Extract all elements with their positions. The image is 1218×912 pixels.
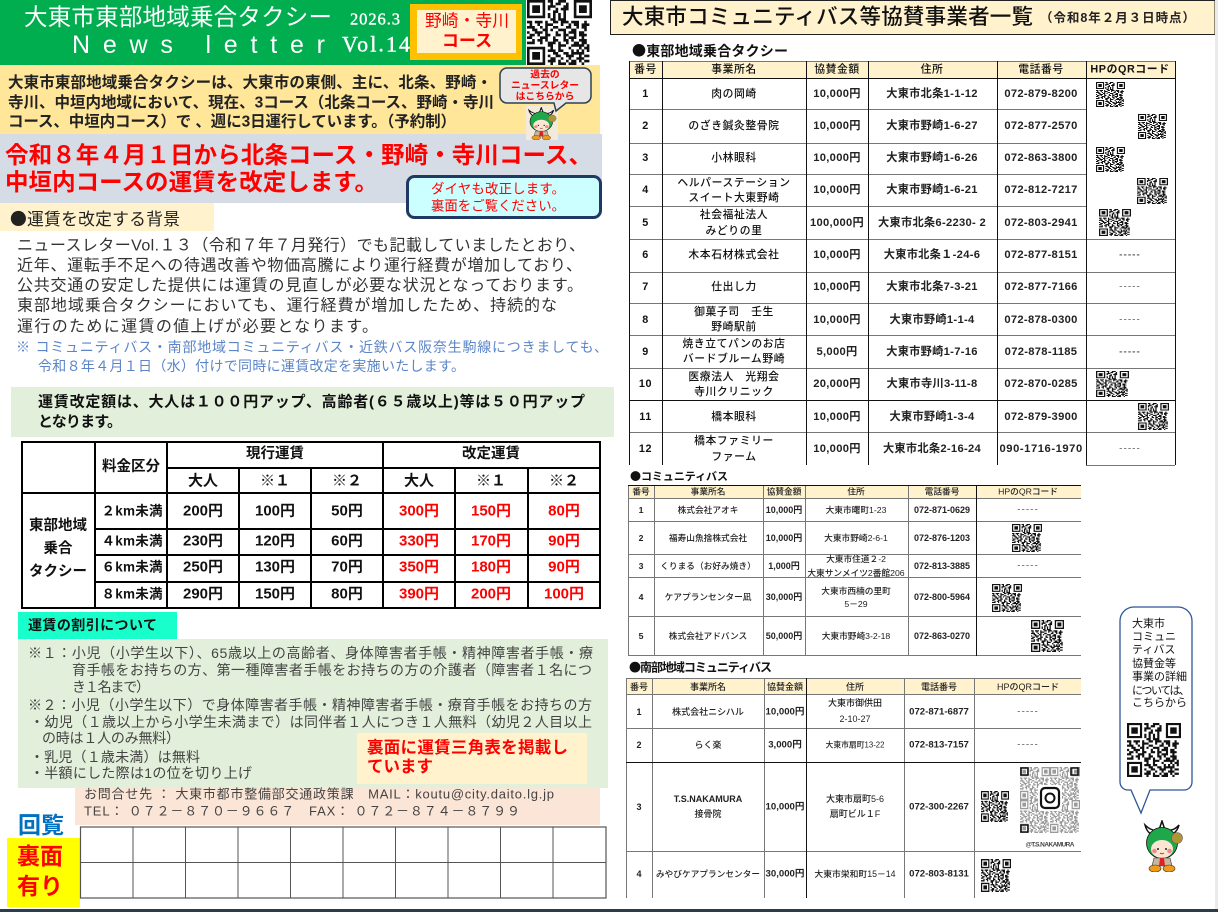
table: eastern taxi sponsors: 10,000円	[813, 410, 861, 423]
table: southern community bus sponsors: T.S.NAKAMURA	[674, 794, 743, 804]
fare table header: 大人	[188, 472, 218, 490]
table: eastern taxi sponsors: 072-877-2570	[1004, 120, 1078, 132]
fare table rows: 100円	[544, 586, 584, 602]
text block: background explanation: ニュースレターVol.１３（令和７年７月発行）でも記載していましたとおり、	[17, 236, 585, 254]
intro panel	[0, 65, 600, 134]
text block: background explanation: 公共交通の安定した提供には運賃の見直しが必要な状況となっております。	[17, 276, 583, 294]
table: southern community bus sponsors: 072-813-7157	[909, 740, 969, 750]
speech bubble: sponsorship details: ティバス	[1132, 643, 1175, 656]
newsletter wordmark: News letter	[72, 31, 325, 59]
table: community bus sponsors: 072-863-0270	[914, 631, 970, 641]
table: southern community bus sponsors: 4	[636, 869, 642, 879]
QR codes: southern bus	[981, 791, 1011, 892]
table: eastern taxi sponsors: 大東市北条2-16-24	[883, 441, 982, 455]
fare table rows: 150円	[471, 502, 511, 520]
table: community bus sponsors: 30,000円	[766, 592, 802, 602]
right title bar: （令和8年２月３日時点）	[1040, 10, 1195, 25]
fare table header: ※１	[476, 472, 506, 490]
table header: 協賛金額	[814, 62, 860, 76]
table: eastern taxi sponsors: 5	[642, 217, 649, 229]
fare table header: 現行運賃	[246, 445, 304, 462]
intro panel: 寺川、中垣内地域において、現在、3コース（北条コース、野崎・寺川	[8, 92, 494, 112]
panel: discount details: ・幼児（１歳以上から小学生未満まで）は同伴者１人につき１人無料（幼児２人目以上	[30, 714, 592, 730]
table: eastern taxi sponsors: -----	[1119, 314, 1141, 326]
table: community bus sponsors: 大東サンメイツ2番館206	[807, 567, 905, 578]
text block: background explanation: 近年、運転手不足への待遇改善や物価高騰により運行経費が増加しており、	[17, 256, 582, 274]
speech bubble: past newsletters: ニュースレター	[511, 80, 579, 92]
panel: discount details: ※２：小児（小学生以下）で身体障害者手帳・精神障害者手帳・療育手帳をお持ちの方	[28, 697, 592, 713]
speech bubble: sponsorship details: こちらから	[1132, 696, 1187, 709]
panel: discount details: き１名まで）	[72, 679, 150, 695]
table: eastern taxi sponsors: 072-877-8151	[1004, 249, 1078, 261]
note: other bus lines	[16, 339, 608, 374]
table: southern community bus sponsors: 072-803-8131	[909, 868, 970, 880]
table: community bus sponsors: 2	[639, 533, 644, 543]
icon: Instagram QR code: @T.S.NAKAMURA	[1026, 842, 1075, 848]
table header: 住所	[921, 62, 943, 76]
table header: 番号	[632, 486, 650, 496]
note: other bus lines: ※ コミュニティバス・南部地域コミュニティバス・近鉄バス阪奈生駒線につきましても、	[16, 339, 608, 355]
table: eastern taxi sponsors: 大東市野崎1-6-27	[886, 118, 978, 132]
table: southern community bus sponsors: 30,000円	[766, 868, 804, 880]
table: community bus sponsors: 4	[639, 592, 644, 602]
QR code: sponsorship details	[1127, 723, 1181, 777]
table: eastern taxi sponsors: -----	[1119, 250, 1141, 260]
heading: southern community bus sponsors: ●南部地域コミュニティバス	[629, 658, 772, 676]
header banner	[0, 0, 526, 65]
fare revision headline: 中垣内コースの運賃を改定します。	[5, 169, 378, 195]
table: southern community bus sponsors: 3	[636, 802, 642, 812]
speech bubble: past newsletters: 過去の	[530, 68, 560, 80]
table: eastern taxi sponsors: 7	[642, 281, 649, 293]
heading: community bus sponsors: ●コミュニティバス	[630, 468, 728, 484]
fare table header: ※１	[260, 472, 290, 490]
table: community bus sponsors: 072-871-0629	[914, 505, 970, 515]
heading: fare discounts: 運賃の割引について	[28, 617, 157, 633]
table: eastern taxi sponsors: 10,000円	[813, 119, 861, 132]
table: eastern taxi sponsors: 大東市野崎1-7-16	[886, 344, 978, 358]
fare table header: 料金区分	[102, 457, 160, 475]
fare table row label: 東部地域	[29, 517, 87, 534]
table: eastern taxi sponsors: 10,000円	[813, 313, 861, 326]
table: eastern taxi sponsors: 大東市野崎1-6-26	[886, 150, 978, 164]
table: eastern taxi sponsors: 10,000円	[813, 87, 861, 100]
table: eastern taxi sponsors: 5,000円	[817, 345, 857, 358]
table: eastern taxi sponsors: ヘルパーステーション	[677, 176, 791, 189]
right title bar	[610, 0, 1215, 34]
table: eastern taxi sponsors: のざき鍼灸整骨院	[688, 118, 780, 132]
table header: 番号	[634, 62, 657, 76]
heading: eastern taxi sponsors: ●東部地域乗合タクシー	[632, 41, 788, 61]
heading: background of revision	[0, 203, 214, 231]
table: community bus sponsors: 072-800-5964	[914, 592, 970, 602]
table: southern community bus sponsors: -----	[1017, 740, 1039, 750]
table: southern community bus sponsors: 10,000円	[766, 802, 804, 812]
table header: HPのQRコード	[997, 682, 1059, 692]
mascot: bottom right	[1145, 821, 1182, 872]
table: community bus sponsors: -----	[1017, 504, 1039, 516]
table: eastern taxi sponsors: 072-812-7217	[1004, 184, 1078, 196]
table header: 住所	[847, 486, 865, 496]
table: eastern taxi sponsors: 大東市野崎1-1-4	[889, 312, 975, 326]
table: eastern taxi sponsors: 10,000円	[813, 442, 861, 455]
table: eastern taxi sponsors: -----	[1119, 346, 1141, 358]
fare table row label: タクシー	[29, 563, 87, 580]
table: eastern taxi sponsors: 10,000円	[813, 151, 861, 164]
fare table rows: 50円	[331, 502, 363, 520]
table: eastern taxi sponsors: 大東市寺川3-11-8	[887, 376, 977, 390]
table: eastern taxi sponsors: スイート大東野崎	[688, 190, 780, 204]
heading: fare discounts	[18, 612, 177, 639]
text block: background explanation: 東部地域乗合タクシーにおいても、運行経費が増加したため、持続的な	[17, 296, 557, 314]
table: eastern taxi sponsors: 6	[642, 249, 649, 261]
table: community bus sponsors: 1,000円	[768, 561, 800, 571]
fare table rows	[102, 502, 584, 602]
table: eastern taxi sponsors: 10,000円	[813, 280, 861, 293]
table header: 電話番号	[925, 486, 960, 496]
table: eastern taxi sponsors	[629, 61, 1176, 466]
table: community bus sponsors: 大東市住道２-2	[826, 553, 886, 564]
table: community bus sponsors: 072-876-1203	[914, 533, 970, 543]
table: eastern taxi sponsors: 大東市北条1-1-12	[886, 86, 978, 100]
table: eastern taxi sponsors: 大東市北条7-3-21	[886, 279, 978, 293]
table: southern community bus sponsors: 大東市栄和町15－14	[814, 868, 896, 879]
issue date: 2026.3	[350, 10, 400, 28]
speech bubble: sponsorship details: 事業の詳細	[1132, 669, 1187, 683]
title: 大東市東部地域乗合タクシー	[24, 4, 332, 30]
table: community bus sponsors: 株式会社アドバンス	[669, 630, 747, 641]
speech bubble: sponsorship details: 協賛金等	[1132, 656, 1176, 670]
panel: discount details: の時は１人のみ無料）	[42, 730, 180, 746]
table: community bus sponsors: 3	[639, 561, 644, 571]
mascot: top	[526, 106, 558, 140]
fare table	[22, 442, 600, 608]
fare table rows: 200円	[471, 586, 511, 602]
fare table rows: 170円	[471, 532, 511, 550]
reverse side notice: 有り	[17, 873, 63, 899]
table header: 番号	[630, 681, 648, 692]
table: eastern taxi sponsors: -----	[1119, 444, 1141, 454]
table: eastern taxi sponsors: 072-877-7166	[1004, 281, 1078, 293]
table: eastern taxi sponsors: ファーム	[711, 450, 757, 463]
table: eastern taxi sponsors: 090-1716-1970	[1000, 443, 1082, 455]
fare table rows: ２km未満	[102, 502, 163, 518]
table: eastern taxi sponsors: 20,000円	[813, 377, 861, 390]
panel: discount details	[18, 639, 608, 788]
table header: 協賛金額	[767, 681, 803, 692]
fare table rows: 350円	[399, 558, 439, 576]
table: community bus sponsors: 株式会社アオキ	[678, 504, 738, 515]
table: eastern taxi sponsors: 医療法人 光翔会	[688, 369, 780, 383]
note: other bus lines: 令和８年４月１日（水）付けで同時に運賃改定を実施いたします。	[38, 358, 465, 374]
table: eastern taxi sponsors: 10,000円	[813, 183, 861, 196]
table header: HPのQRコード	[998, 486, 1058, 496]
right title bar: 大東市コミュニティバス等協賛事業者一覧	[622, 5, 1033, 29]
volume: Vol.14	[342, 32, 410, 56]
table: southern community bus sponsors: 大東市御供田	[828, 697, 882, 708]
fare table header	[102, 445, 579, 490]
table: eastern taxi sponsors: 橋本眼科	[711, 409, 757, 423]
table: eastern taxi sponsors: 10,000円	[813, 248, 861, 261]
course badge: 野崎・寺川	[425, 12, 509, 30]
table: community bus sponsors: 50,000円	[766, 631, 802, 641]
table: community bus sponsors: 10,000円	[766, 505, 802, 515]
table: southern community bus sponsors: 072-871-6877	[909, 706, 969, 718]
table header	[628, 485, 1081, 498]
table header	[629, 61, 1175, 78]
table: community bus sponsors: 大東市野崎2-6-1	[824, 532, 888, 543]
table: southern community bus sponsors: 株式会社ニシハル	[672, 706, 744, 717]
table: eastern taxi sponsors: 072-879-8200	[1004, 88, 1078, 100]
fare table row label	[29, 517, 87, 580]
table: eastern taxi sponsors: 大東市野崎1-6-21	[886, 182, 978, 196]
table: community bus sponsors: 1	[639, 505, 644, 515]
intro panel: コース、中垣内コース）で 、週に3日運行しています。（予約制）	[8, 112, 456, 130]
table: southern community bus sponsors: 大東市扇町5-6	[826, 793, 884, 804]
table: southern community bus sponsors: 1	[636, 707, 642, 717]
panel: revision amount: 運賃改定額は、大人は１００円アップ、高齢者(６５歳以上)等は５０円アップ	[38, 392, 585, 410]
fare table rows: 90円	[548, 558, 580, 576]
fare table header: 改定運賃	[462, 445, 520, 462]
table header: HPのQRコード	[1090, 64, 1170, 76]
table: southern community bus sponsors: らく楽	[694, 739, 722, 750]
table: eastern taxi sponsors: みどりの里	[706, 224, 762, 237]
table: eastern taxi sponsors: 11	[639, 411, 652, 423]
fare table rows: 330円	[399, 532, 439, 550]
table header	[626, 678, 1081, 694]
fare table rows: ６km未満	[102, 558, 163, 574]
fare table rows: 290円	[183, 586, 223, 602]
callout: fare triangle table on reverse: ています	[367, 757, 433, 776]
table: eastern taxi sponsors: 12	[639, 443, 652, 455]
table: community bus sponsors: ケアプランセンター凪	[665, 591, 752, 602]
speech bubble: past newsletters: はこちらから	[516, 90, 574, 102]
table header: 事業所名	[711, 62, 757, 76]
window edge strips	[1215, 0, 1218, 910]
table: eastern taxi sponsors: 072-803-2941	[1004, 217, 1078, 229]
callout: timetable revised: 裏面をご覧ください。	[431, 198, 565, 214]
panel: discount details: ※１：小児（小学生以下）、65歳以上の高齢者、身体障害者手帳・精神障害者手帳・療	[28, 645, 593, 661]
table header: 事業所名	[690, 681, 726, 692]
table header: 電話番号	[1018, 62, 1064, 76]
fare table rows: 200円	[183, 502, 223, 520]
table: eastern taxi sponsors: 072-878-0300	[1004, 314, 1078, 326]
text block: background explanation: 運行のために運賃の値上げが必要となります。	[17, 318, 378, 336]
table: southern community bus sponsors: 大東市扇町13-22	[826, 740, 884, 750]
table: southern community bus sponsors: みやびケアプランセンター	[656, 868, 760, 879]
fare table rows: 150円	[255, 586, 295, 602]
course badge: コース	[442, 32, 492, 50]
table: southern community bus sponsors: 2-10-27	[839, 714, 871, 724]
circulation stamp grid	[80, 827, 606, 898]
table: southern community bus sponsors: 072-300-2267	[909, 802, 969, 812]
table: eastern taxi sponsors: 072-878-1185	[1005, 346, 1077, 358]
panel: revision amount: となります。	[38, 414, 122, 430]
table: community bus sponsors: 5－29	[844, 599, 868, 609]
contact box: TEL： ０７２－８７０－９６６７ FAX： ０７２－８７４－８７９９	[84, 804, 520, 818]
fare table rows: 180円	[471, 558, 511, 576]
table: community bus sponsors: 5	[639, 631, 644, 641]
callout: fare triangle table on reverse: 裏面に運賃三角表を掲載し	[367, 737, 568, 757]
fare table row label: 乗合	[44, 540, 73, 557]
table: eastern taxi sponsors: 8	[642, 314, 649, 326]
callout: timetable revised	[408, 176, 600, 218]
table: community bus sponsors: 大東市西楠の里町	[821, 585, 891, 596]
fare table rows: 80円	[548, 502, 580, 520]
table: community bus sponsors: 福寿山魚捨株式会社	[669, 532, 747, 543]
table: southern community bus sponsors: 扇町ビル１F	[830, 808, 881, 819]
table: eastern taxi sponsors: 大東市北条１-24-6	[884, 247, 980, 261]
table: southern community bus sponsors: -----	[1017, 706, 1039, 718]
table: eastern taxi sponsors: 小林眼科	[711, 150, 757, 164]
fare table rows: ８km未満	[102, 586, 163, 602]
table: eastern taxi sponsors: 100,000円	[810, 216, 864, 229]
speech bubble: sponsorship details: 大東市	[1132, 616, 1165, 630]
panel: discount details: ・半額にした際は1の位を切り上げ	[30, 765, 252, 781]
table: southern community bus sponsors: 接骨院	[694, 808, 722, 819]
fare table rows: 70円	[331, 558, 363, 576]
fare table header: ※２	[549, 472, 579, 490]
reverse side notice	[7, 838, 80, 907]
table: southern community bus sponsors: 3,000円	[768, 740, 802, 750]
speech bubble: sponsorship details	[1120, 607, 1192, 813]
reverse side notice: 裏面	[17, 843, 63, 869]
text block: background explanation	[16, 236, 608, 374]
heading: background of revision: ●運賃を改定する背景	[10, 206, 180, 230]
table: community bus sponsors: くりまる（お好み焼き）	[660, 560, 756, 571]
fare table rows: 60円	[331, 532, 363, 550]
table: eastern taxi sponsors: 仕出し力	[711, 280, 757, 293]
contact box: お問合せ先 ： 大東市都市整備部交通政策課 MAIL：koutu@city.daito.lg.jp	[84, 786, 554, 802]
fare table rows: 80円	[331, 586, 363, 602]
table: eastern taxi sponsors: 072-863-3800	[1004, 152, 1078, 164]
table: eastern taxi sponsors: -----	[1119, 282, 1141, 292]
panel: discount details: ・乳児（１歳未満）は無料	[30, 749, 200, 765]
table: community bus sponsors: 大東市曙町1-23	[826, 504, 887, 515]
table: community bus sponsors: 10,000円	[766, 533, 802, 543]
table: eastern taxi sponsors: 大東市野崎1-3-4	[889, 409, 975, 423]
table: eastern taxi sponsors: 9	[642, 346, 649, 358]
fare table header: 大人	[404, 472, 434, 490]
table: eastern taxi sponsors: バードブルーム野崎	[683, 351, 785, 365]
table header: 協賛金額	[767, 486, 802, 496]
table: eastern taxi sponsors: 2	[642, 120, 649, 132]
table: southern community bus sponsors: 10,000円	[766, 706, 804, 718]
fare table rows: 250円	[183, 558, 223, 576]
fare table rows: 90円	[548, 532, 580, 550]
panel: revision amount	[11, 387, 614, 437]
callout: timetable revised: ダイヤも改正します。	[431, 182, 565, 196]
table: southern community bus sponsors: 2	[636, 740, 642, 750]
panel: discount details: 育手帳をお持ちの方、第一種障害者手帳をお持ちの方の介護者（障害者１名につ	[72, 662, 592, 678]
course badge	[410, 4, 522, 60]
circulation label: 回覧	[18, 812, 64, 838]
QR codes: eastern taxi	[1096, 82, 1169, 430]
table: eastern taxi sponsors: 野崎駅前	[711, 319, 757, 333]
table: eastern taxi sponsors: 社会福祉法人	[700, 207, 768, 221]
contact box	[75, 786, 600, 825]
fare table rows: 120円	[255, 532, 295, 550]
fare table rows: 230円	[183, 532, 223, 550]
table: eastern taxi sponsors: 10	[639, 378, 652, 390]
table: eastern taxi sponsors: 3	[642, 152, 649, 164]
fare table rows: 390円	[399, 586, 439, 602]
table: eastern taxi sponsors: 大東市北条6-2230- 2	[878, 215, 986, 229]
fare revision headline	[0, 134, 602, 203]
table header: 住所	[846, 681, 864, 692]
table: community bus sponsors: 大東市野崎3-2-18	[822, 630, 890, 641]
speech bubble: sponsorship details: コミュニ	[1132, 631, 1176, 643]
fare table rows: 300円	[399, 502, 439, 520]
table: eastern taxi sponsors: 焼き立てパンのお店	[682, 336, 786, 350]
QR code: header	[527, 0, 592, 65]
table header: 電話番号	[921, 681, 957, 692]
table: eastern taxi sponsors: 072-870-0285	[1004, 378, 1078, 390]
table: eastern taxi sponsors: 肉の岡崎	[711, 86, 757, 100]
speech bubble: sponsorship details: については、	[1132, 684, 1190, 697]
table: eastern taxi sponsors: 1	[642, 88, 649, 100]
table: southern community bus sponsors	[626, 678, 1081, 898]
table: community bus sponsors	[628, 485, 1081, 656]
table: community bus sponsors: -----	[1017, 560, 1039, 572]
fare table rows: 100円	[255, 502, 295, 520]
table: community bus sponsors: 072-813-3885	[914, 561, 970, 571]
speech bubble: past newsletters	[500, 68, 591, 111]
QR codes: community bus	[992, 524, 1064, 652]
icon: Instagram QR code	[1020, 767, 1080, 848]
table: eastern taxi sponsors: 木本石材株式会社	[688, 247, 780, 261]
table: eastern taxi sponsors: 御菓子司 壬生	[694, 304, 774, 318]
fare revision headline: 令和８年４月１日から北条コース・野崎・寺川コース、	[5, 142, 592, 168]
fare table rows: 130円	[255, 558, 295, 576]
intro panel: 大東市東部地域乗合タクシーは、大東市の東側、主に、北条、野崎・	[8, 72, 492, 92]
table: eastern taxi sponsors: 橋本ファミリー	[694, 433, 774, 447]
table: eastern taxi sponsors: 4	[642, 184, 649, 196]
fare table header: ※２	[332, 472, 362, 490]
table header: 事業所名	[691, 486, 725, 496]
table: eastern taxi sponsors: 072-879-3900	[1004, 411, 1078, 423]
table: eastern taxi sponsors: 寺川クリニック	[694, 385, 774, 398]
fare table rows: ４km未満	[102, 532, 163, 548]
callout: fare triangle table on reverse	[357, 733, 587, 784]
